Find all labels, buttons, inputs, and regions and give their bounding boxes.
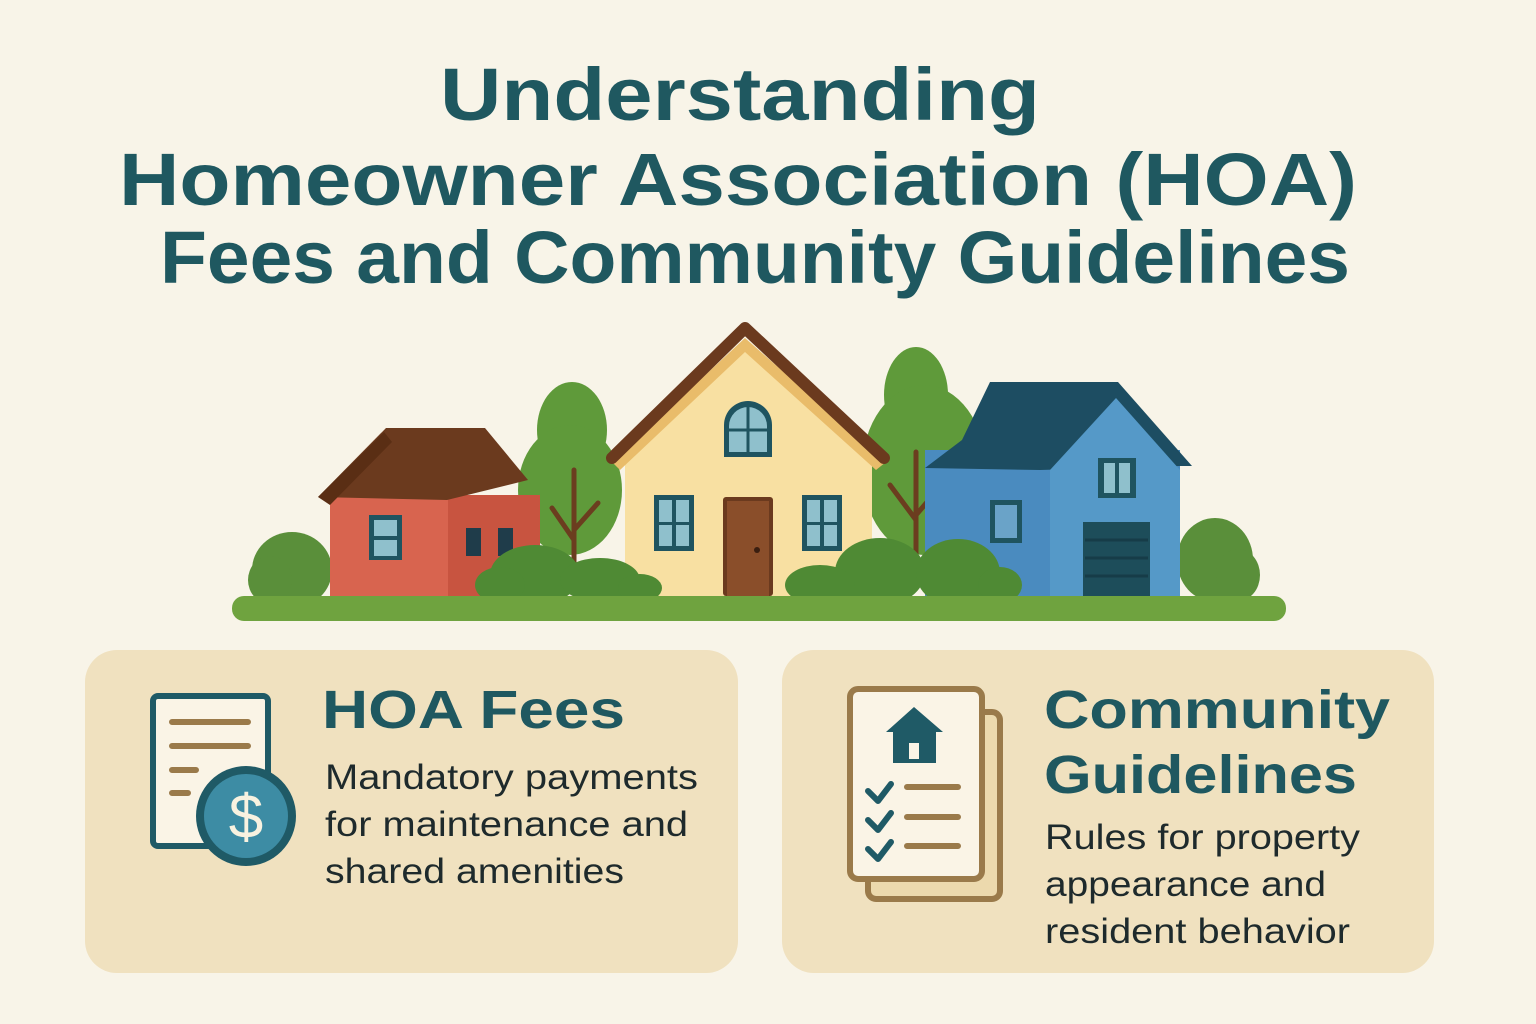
heading: Guidelines: [1044, 745, 1357, 805]
title: Fees and Community Guidelines: [160, 216, 1350, 299]
text block: resident behavior: [1045, 912, 1350, 951]
heading: HOA Fees: [322, 680, 625, 740]
text block: shared amenities: [325, 852, 624, 891]
blue house: [925, 382, 1192, 596]
text block: appearance and: [1045, 865, 1326, 904]
text block: Mandatory payments: [325, 758, 698, 797]
title: Understanding: [440, 53, 1040, 136]
illustration: neighborhood houses: [232, 328, 1286, 621]
text block: [1045, 818, 1361, 951]
text block: for maintenance and: [325, 805, 688, 844]
tree right: [862, 347, 986, 575]
heading: [1044, 680, 1390, 805]
tree left: [518, 382, 622, 575]
icon: checklist document: [850, 689, 1000, 899]
yellow house: [612, 328, 886, 596]
bushes back: [248, 518, 1260, 608]
icon: document with dollar coin: [153, 696, 296, 866]
title: Homeowner Association (HOA): [119, 138, 1357, 221]
panel: community guidelines: [782, 650, 1434, 973]
icon: document with dollar coin: $: [229, 783, 263, 852]
heading: Community: [1044, 680, 1390, 740]
red house: [318, 428, 540, 596]
ground: [232, 596, 1286, 621]
title: [119, 53, 1357, 299]
bushes front: [475, 538, 1022, 607]
text block: Rules for property: [1045, 818, 1361, 857]
panel: HOA fees: [85, 650, 738, 973]
text block: [325, 758, 698, 891]
